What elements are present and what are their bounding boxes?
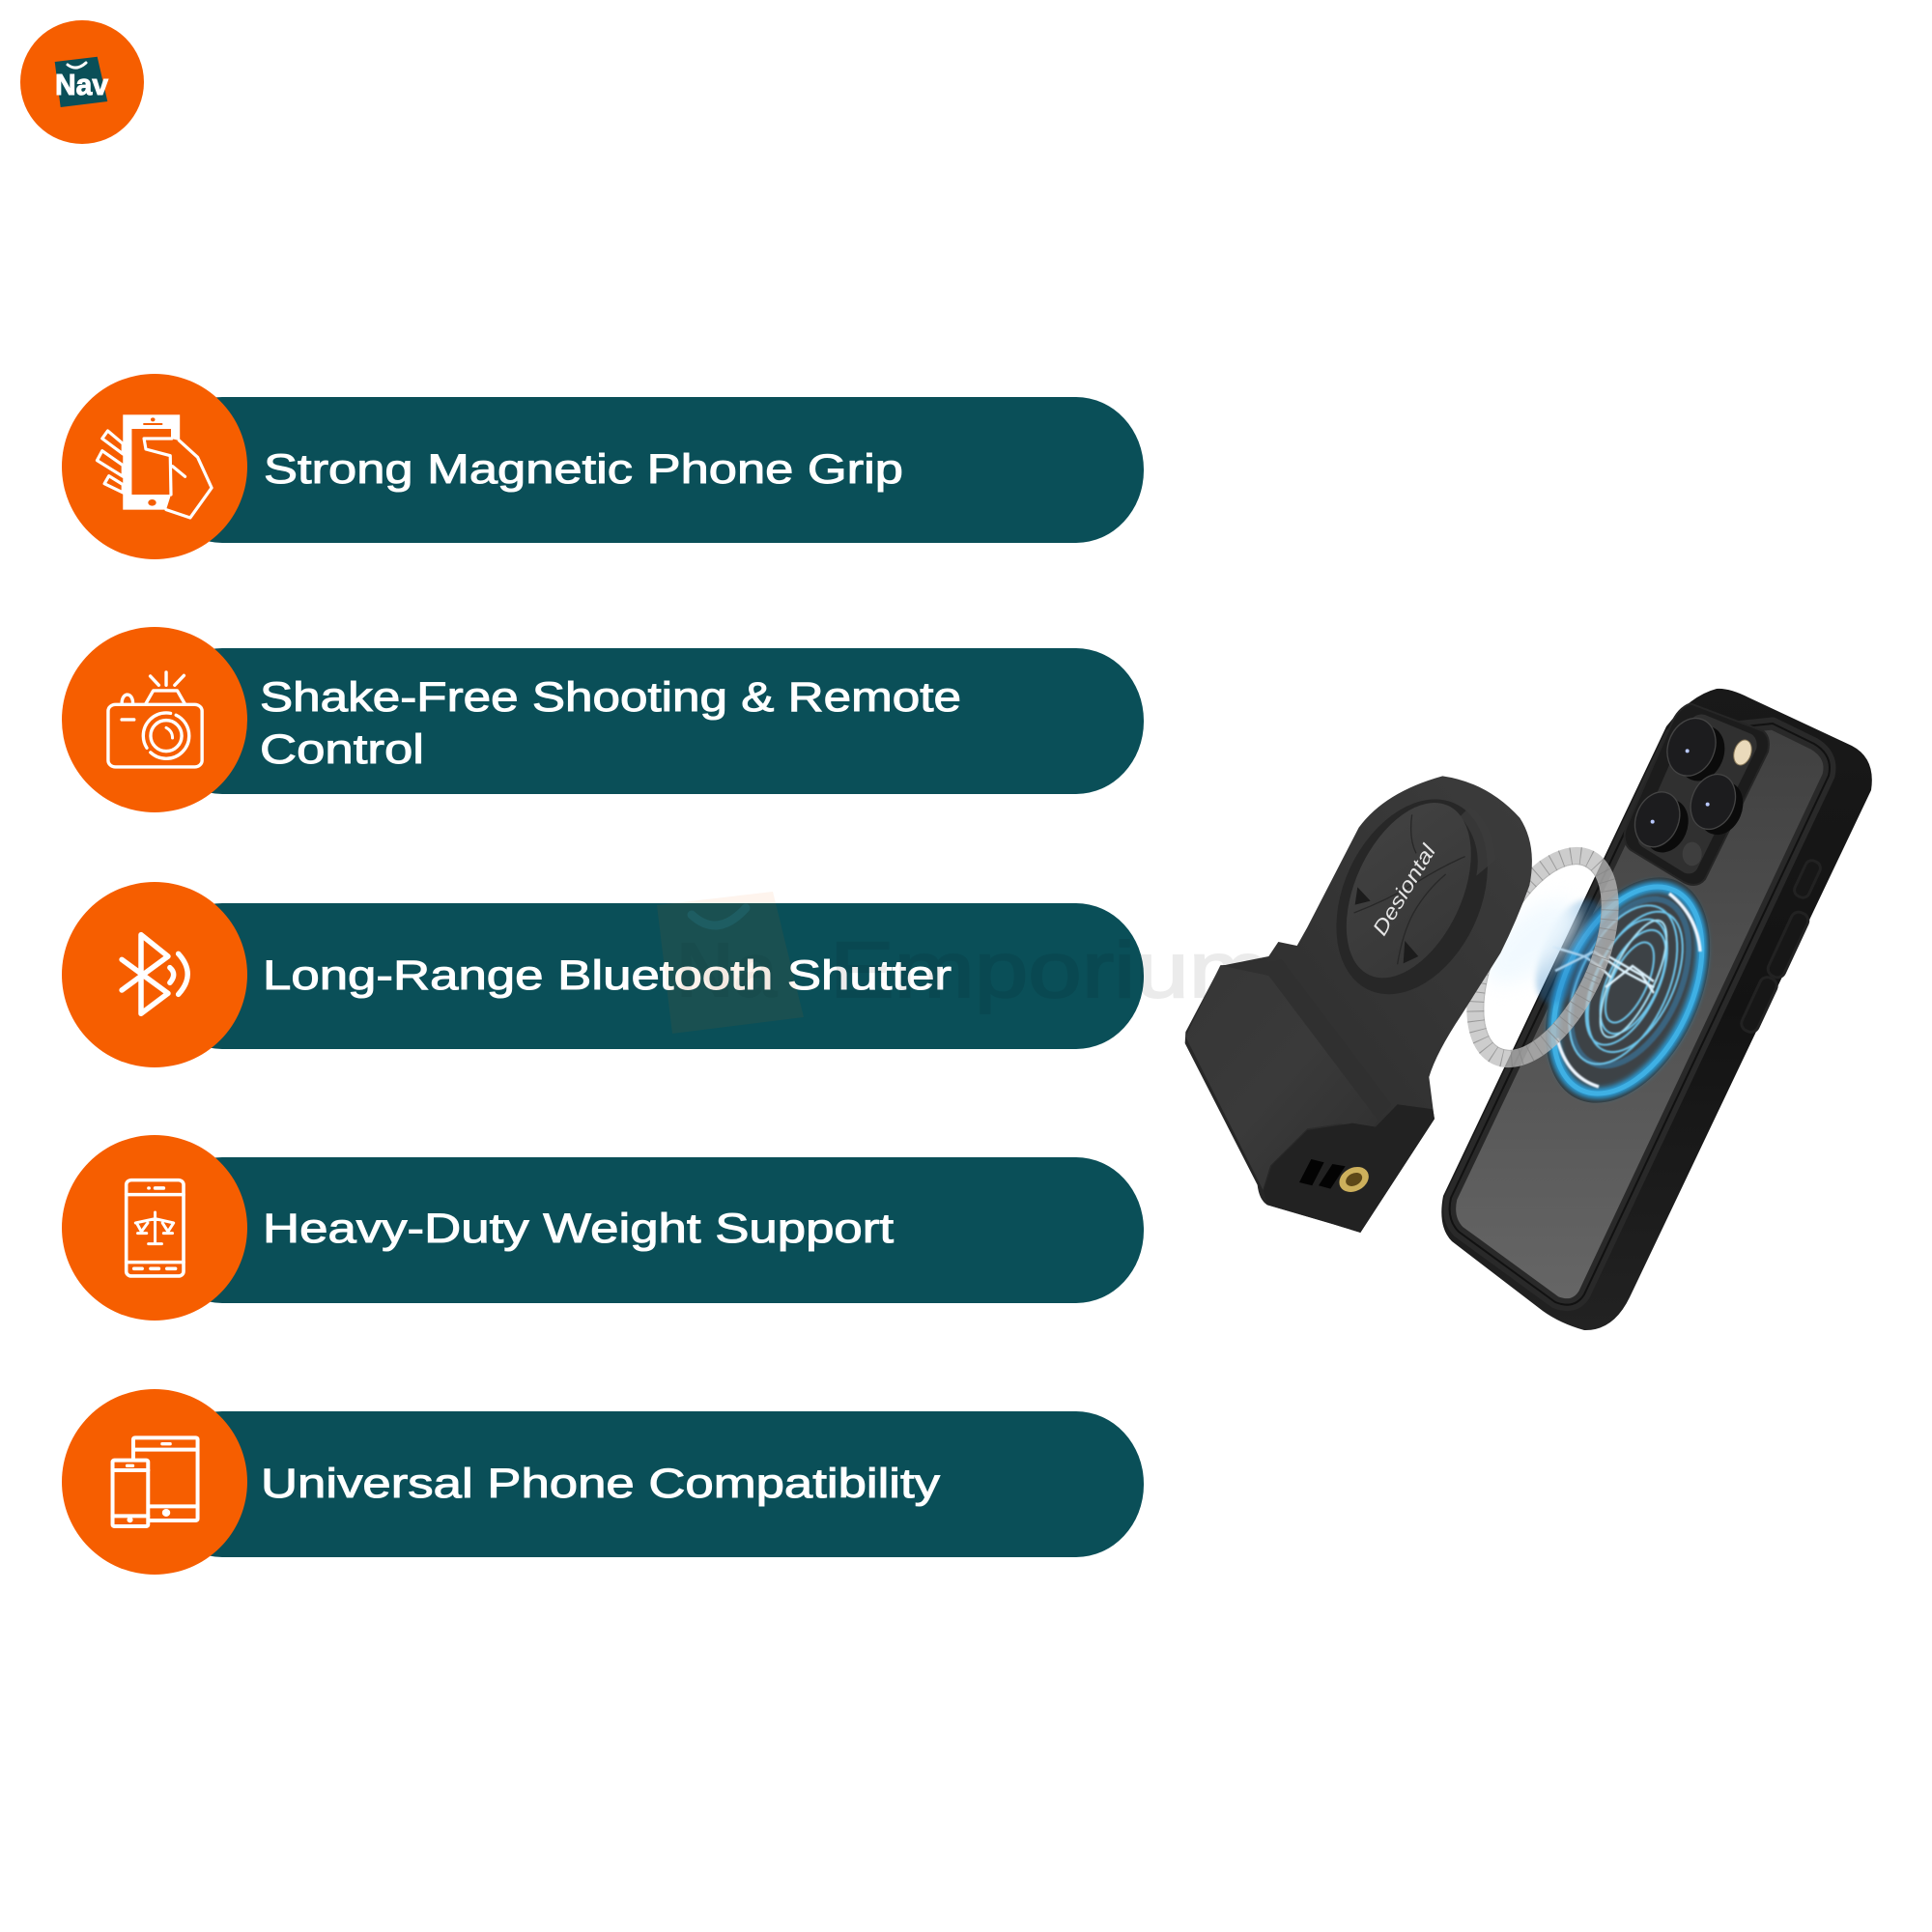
icon: camera with flash bbox=[108, 672, 202, 767]
icon disc 2 bbox=[62, 627, 247, 812]
swirl bbox=[1547, 881, 1713, 1085]
feature bar 4 bbox=[155, 1157, 1144, 1303]
icon disc 3 bbox=[62, 882, 247, 1067]
text: feature 4: Heavy-Duty Weight Support bbox=[263, 1206, 894, 1252]
product illustration bbox=[1185, 689, 1872, 1330]
watermark bbox=[657, 892, 1269, 1034]
magnetic grip bbox=[1185, 775, 1532, 1233]
icon disc 4 bbox=[62, 1135, 247, 1321]
side buttons bbox=[1739, 858, 1823, 1035]
tripod mount and vents bbox=[1299, 1159, 1373, 1197]
feature bar 5 bbox=[155, 1411, 1144, 1557]
text: feature 2: Control bbox=[260, 726, 424, 773]
icon disc 1 bbox=[62, 374, 247, 559]
icon: bluetooth signal bbox=[122, 935, 187, 1013]
text: feature 2 bbox=[260, 674, 961, 773]
icon: phone and tablet bbox=[113, 1437, 198, 1526]
grip end face bbox=[1264, 1104, 1435, 1233]
grip handle bbox=[1185, 964, 1384, 1190]
magnetic glow ring bbox=[1513, 851, 1743, 1129]
watermark: Na bbox=[676, 926, 779, 1014]
icon: hand holding phone bbox=[97, 414, 212, 518]
text: feature 5: Universal Phone Compatibility bbox=[261, 1461, 941, 1507]
camera island bbox=[1625, 703, 1769, 885]
phone bbox=[1441, 689, 1872, 1330]
disc face: Desiontal bbox=[1368, 839, 1441, 940]
text: feature 2: Shake-Free Shooting & Remote bbox=[260, 674, 961, 721]
feature bar 3 bbox=[155, 903, 1144, 1049]
watermark: Emporium bbox=[830, 926, 1269, 1014]
logo badge bbox=[20, 20, 144, 144]
text: feature 1: Strong Magnetic Phone Grip bbox=[264, 446, 903, 493]
text: feature 3: Long-Range Bluetooth Shutter bbox=[263, 952, 952, 999]
logo badge: Nav bbox=[55, 68, 109, 101]
feature bar 2 bbox=[155, 648, 1144, 794]
icon disc 5 bbox=[62, 1389, 247, 1575]
feature bar 1 bbox=[155, 397, 1144, 543]
metal ring bbox=[1447, 836, 1638, 1079]
lightning bbox=[1552, 947, 1654, 993]
icon: phone with scale bbox=[127, 1180, 184, 1276]
disc face bbox=[1307, 775, 1518, 1019]
